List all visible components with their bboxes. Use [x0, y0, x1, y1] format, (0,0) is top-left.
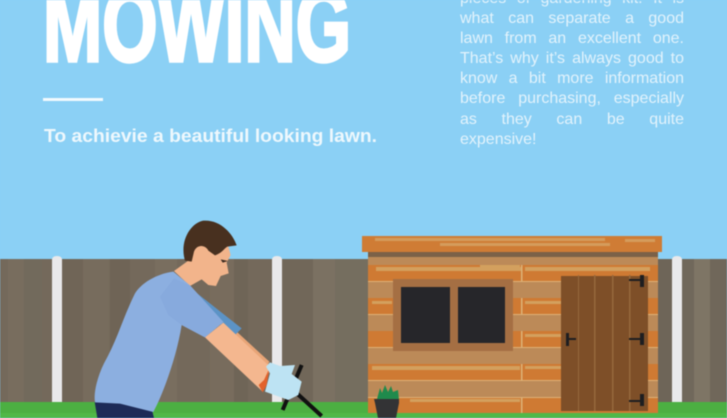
sleeve shade — [160, 278, 223, 337]
shed — [362, 236, 662, 413]
trousers — [95, 402, 154, 418]
shed window — [393, 279, 513, 351]
hair — [183, 221, 237, 262]
title underline rule — [43, 98, 103, 101]
subtitle: To achievie a beautiful looking lawn. — [44, 125, 377, 146]
body paragraph: expensive! — [460, 131, 536, 148]
plant pot — [374, 385, 399, 418]
wooden fence — [0, 259, 727, 403]
lawn — [0, 402, 727, 418]
far sleeve — [195, 292, 242, 335]
glove cuff — [259, 368, 269, 392]
mower handle — [283, 365, 322, 416]
shed wall — [368, 257, 658, 413]
shed roof — [362, 236, 662, 257]
body paragraph: what can separate a good — [460, 10, 684, 27]
body paragraph: know a bit more information — [460, 70, 684, 87]
man pushing a mower — [95, 221, 322, 418]
far arm — [227, 332, 269, 375]
shirt — [95, 272, 223, 412]
body paragraph — [460, 0, 684, 148]
near arm — [205, 323, 271, 392]
body paragraph: before purchasing, especially — [460, 90, 684, 107]
eye — [221, 259, 228, 263]
body paragraph: lawn from an excellent one. — [460, 30, 684, 47]
body paragraph: as they can be quite — [460, 111, 684, 128]
body paragraph: That’s why it’s always good to — [460, 50, 684, 67]
shed door — [561, 275, 648, 411]
glove — [265, 362, 302, 400]
neck and face — [174, 242, 231, 286]
fence posts — [52, 256, 682, 402]
door hinges and handle — [566, 275, 644, 406]
